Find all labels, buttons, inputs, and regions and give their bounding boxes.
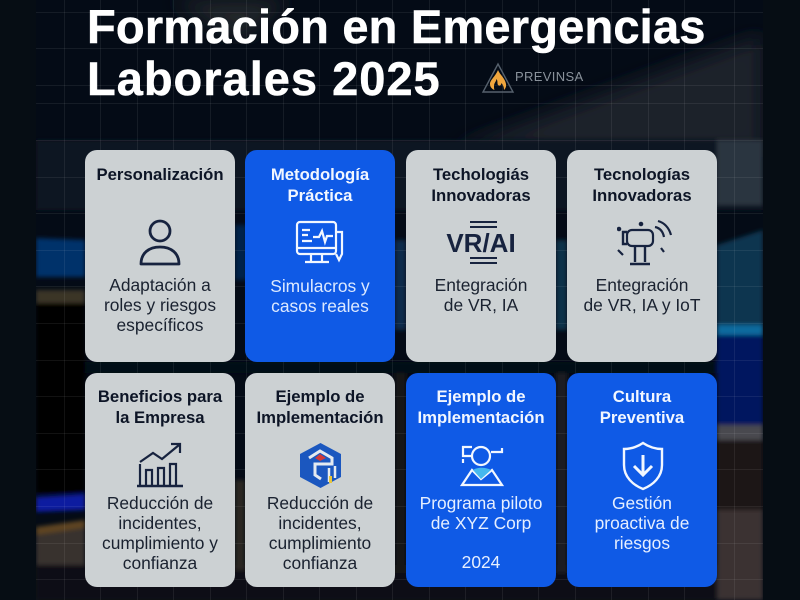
- panel: Beneficios para la Empresa: [85, 373, 235, 587]
- description: [267, 493, 373, 573]
- panel: Tecnologías Innovadoras: [567, 150, 717, 362]
- icon: IoT device: [617, 220, 672, 266]
- description: de VR, IA: [444, 295, 518, 315]
- icon: person in badge: [460, 446, 504, 486]
- heading: Innovadoras: [592, 186, 692, 204]
- heading: [431, 165, 531, 204]
- heading: Personalización: [96, 165, 224, 184]
- panel: Ejemplo de Implementación (azul): [406, 373, 556, 587]
- heading: Ejemplo de: [275, 387, 365, 406]
- heading: [600, 387, 684, 426]
- logo: PREVINSA: [482, 62, 584, 93]
- description: Adaptación a: [109, 275, 211, 295]
- description: de XYZ Corp: [431, 513, 531, 533]
- heading: [271, 165, 370, 204]
- logo: PREVINSA: PREVINSA: [515, 69, 584, 84]
- description: incidentes,: [118, 513, 202, 533]
- heading: Cultura: [613, 387, 671, 406]
- description: de VR, IA y IoT: [584, 295, 700, 315]
- heading: la Empresa: [115, 408, 205, 426]
- description: casos reales: [271, 296, 369, 316]
- description: Entegración: [435, 275, 527, 295]
- heading: [592, 165, 692, 204]
- heading: Techologiás: [433, 165, 529, 184]
- description: confianza: [123, 553, 197, 573]
- description: incidentes,: [278, 513, 362, 533]
- panel: Personalización: [85, 150, 235, 362]
- icon: VR/AI: VR/AI: [446, 228, 516, 258]
- heading: Implementación: [256, 408, 384, 426]
- description: [435, 275, 527, 315]
- description: [270, 276, 370, 316]
- description: [584, 275, 700, 315]
- panel: Ejemplo de Implementación (gris): [245, 373, 395, 587]
- year: 2024: [462, 552, 500, 572]
- description: Gestión: [612, 493, 672, 513]
- description: roles y riesgos: [104, 295, 216, 315]
- icon: hexagon logo: [300, 443, 341, 488]
- icon: shield: [622, 442, 664, 490]
- description: Programa piloto: [420, 493, 542, 513]
- heading: Beneficios para: [98, 387, 222, 406]
- icon: monitor and pen: [296, 220, 344, 264]
- description: proactiva de: [595, 513, 689, 533]
- heading: Preventiva: [600, 408, 684, 426]
- title: Formación en Emergencias: [87, 0, 706, 53]
- heading: Tecnologías: [594, 165, 690, 184]
- heading: Metodología: [271, 165, 369, 184]
- description: [595, 493, 689, 553]
- description: Entegración: [596, 275, 688, 295]
- panel: Cultura Preventiva: [567, 373, 717, 587]
- description: Reducción de: [267, 493, 373, 513]
- heading: [417, 387, 545, 426]
- panel: Techologías Innovadoras: [406, 150, 556, 362]
- description: [102, 493, 218, 573]
- heading: Práctica: [288, 186, 352, 204]
- heading: Innovadoras: [431, 186, 531, 204]
- title: [87, 0, 706, 105]
- heading: Implementación: [417, 408, 545, 426]
- panel: Metodología Práctica: [245, 150, 395, 362]
- description: específicos: [116, 315, 204, 335]
- description: Reducción de: [107, 493, 213, 513]
- description: Simulacros y: [270, 276, 370, 296]
- description: [420, 493, 542, 533]
- heading: [98, 387, 222, 426]
- description: confianza: [283, 553, 357, 573]
- description: cumplimiento: [269, 533, 371, 553]
- description: riesgos: [614, 533, 670, 553]
- heading: [256, 387, 384, 426]
- icon: person: [140, 220, 180, 266]
- icon: growth chart: [137, 442, 183, 488]
- description: cumplimiento y: [102, 533, 218, 553]
- description: [104, 275, 216, 335]
- title: Laborales 2025: [87, 52, 441, 105]
- heading: Ejemplo de: [436, 387, 526, 406]
